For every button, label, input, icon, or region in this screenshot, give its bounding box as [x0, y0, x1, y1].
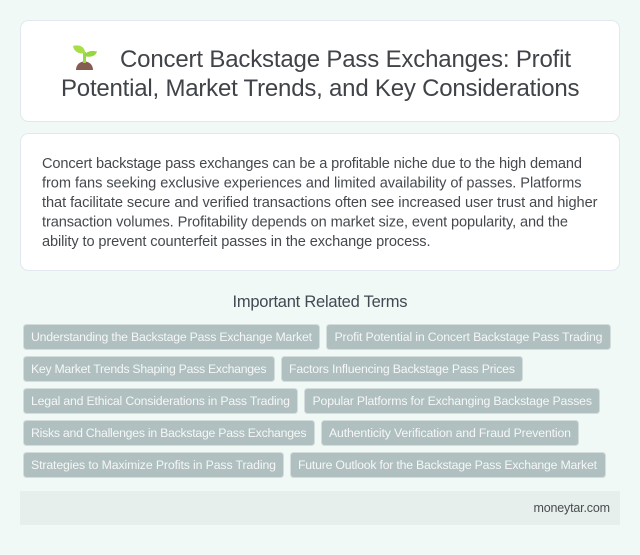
description text: transaction volumes. Profitability depends on market size, event popularity, and the	[42, 214, 568, 230]
tag	[24, 388, 298, 414]
tag	[282, 356, 522, 382]
description text: Concert backstage pass exchanges can be a profitable niche due to the high demand	[42, 156, 582, 172]
tag	[304, 388, 600, 414]
tag: Legal and Ethical Considerations in Pass Trading	[31, 394, 290, 408]
tag: Understanding the Backstage Pass Exchange Market	[31, 330, 313, 344]
description text	[42, 156, 598, 250]
tag	[24, 452, 284, 478]
tag: Factors Influencing Backstage Pass Prices	[289, 362, 515, 376]
panel: description card	[20, 134, 620, 270]
tag: Risks and Challenges in Backstage Pass Exchanges	[31, 426, 306, 440]
tag: Popular Platforms for Exchanging Backstage Passes	[312, 394, 592, 408]
tag	[24, 420, 314, 446]
title line 1: Concert Backstage Pass Exchanges: Profit	[120, 46, 571, 73]
tag: Future Outlook for the Backstage Pass Exchange Market	[298, 458, 598, 472]
tag	[24, 356, 274, 382]
tag: Key Market Trends Shaping Pass Exchanges	[31, 362, 266, 376]
tag: Profit Potential in Concert Backstage Pass Trading	[334, 330, 603, 344]
icon: seedling	[73, 45, 97, 70]
tag	[322, 420, 578, 446]
title line 2: Potential, Market Trends, and Key Considerations	[61, 75, 580, 102]
footer source text: moneytar.com	[534, 501, 610, 515]
description text: that facilitate secure and verified transactions often see increased user trust and higher	[42, 195, 598, 211]
panel: title card	[20, 20, 620, 122]
footer bar	[20, 491, 620, 525]
tag	[24, 324, 320, 350]
tag: Strategies to Maximize Profits in Pass Trading	[31, 458, 276, 472]
heading: related terms: Important Related Terms	[232, 293, 408, 311]
description text: ability to prevent counterfeit passes in the exchange process.	[42, 234, 430, 250]
description text: from fans seeking exclusive experiences and limited availability of passes. Platforms	[42, 176, 582, 192]
tag list	[24, 324, 610, 478]
tag: Authenticity Verification and Fraud Prevention	[329, 426, 571, 440]
tag	[290, 452, 606, 478]
tag	[326, 324, 610, 350]
